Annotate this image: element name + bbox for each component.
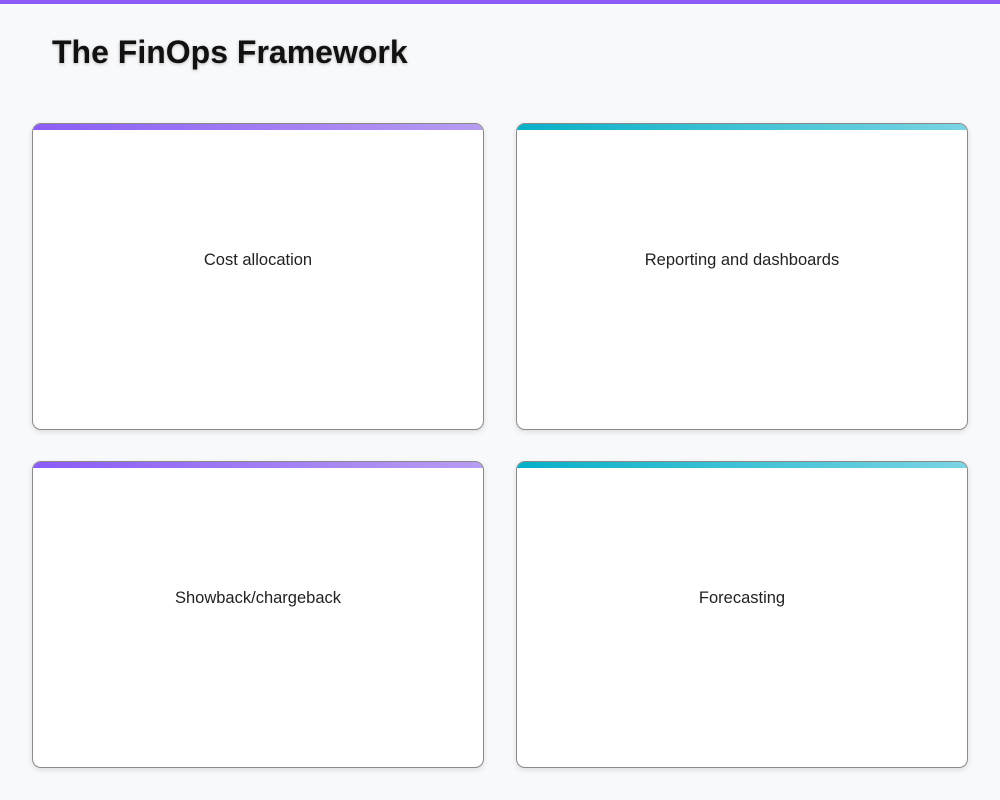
panel: cost allocation: Cost allocation — [204, 251, 312, 269]
panel: forecasting: Forecasting — [699, 589, 785, 607]
panel: forecasting — [516, 461, 968, 768]
panel: reporting and dashboards — [516, 123, 968, 430]
panel: showback/chargeback — [32, 461, 484, 768]
title: The FinOps Framework — [52, 34, 408, 70]
panel: reporting and dashboards: Reporting and dashboards — [645, 251, 839, 269]
panel: showback/chargeback: Showback/chargeback — [175, 589, 341, 607]
panel: cost allocation — [32, 123, 484, 430]
